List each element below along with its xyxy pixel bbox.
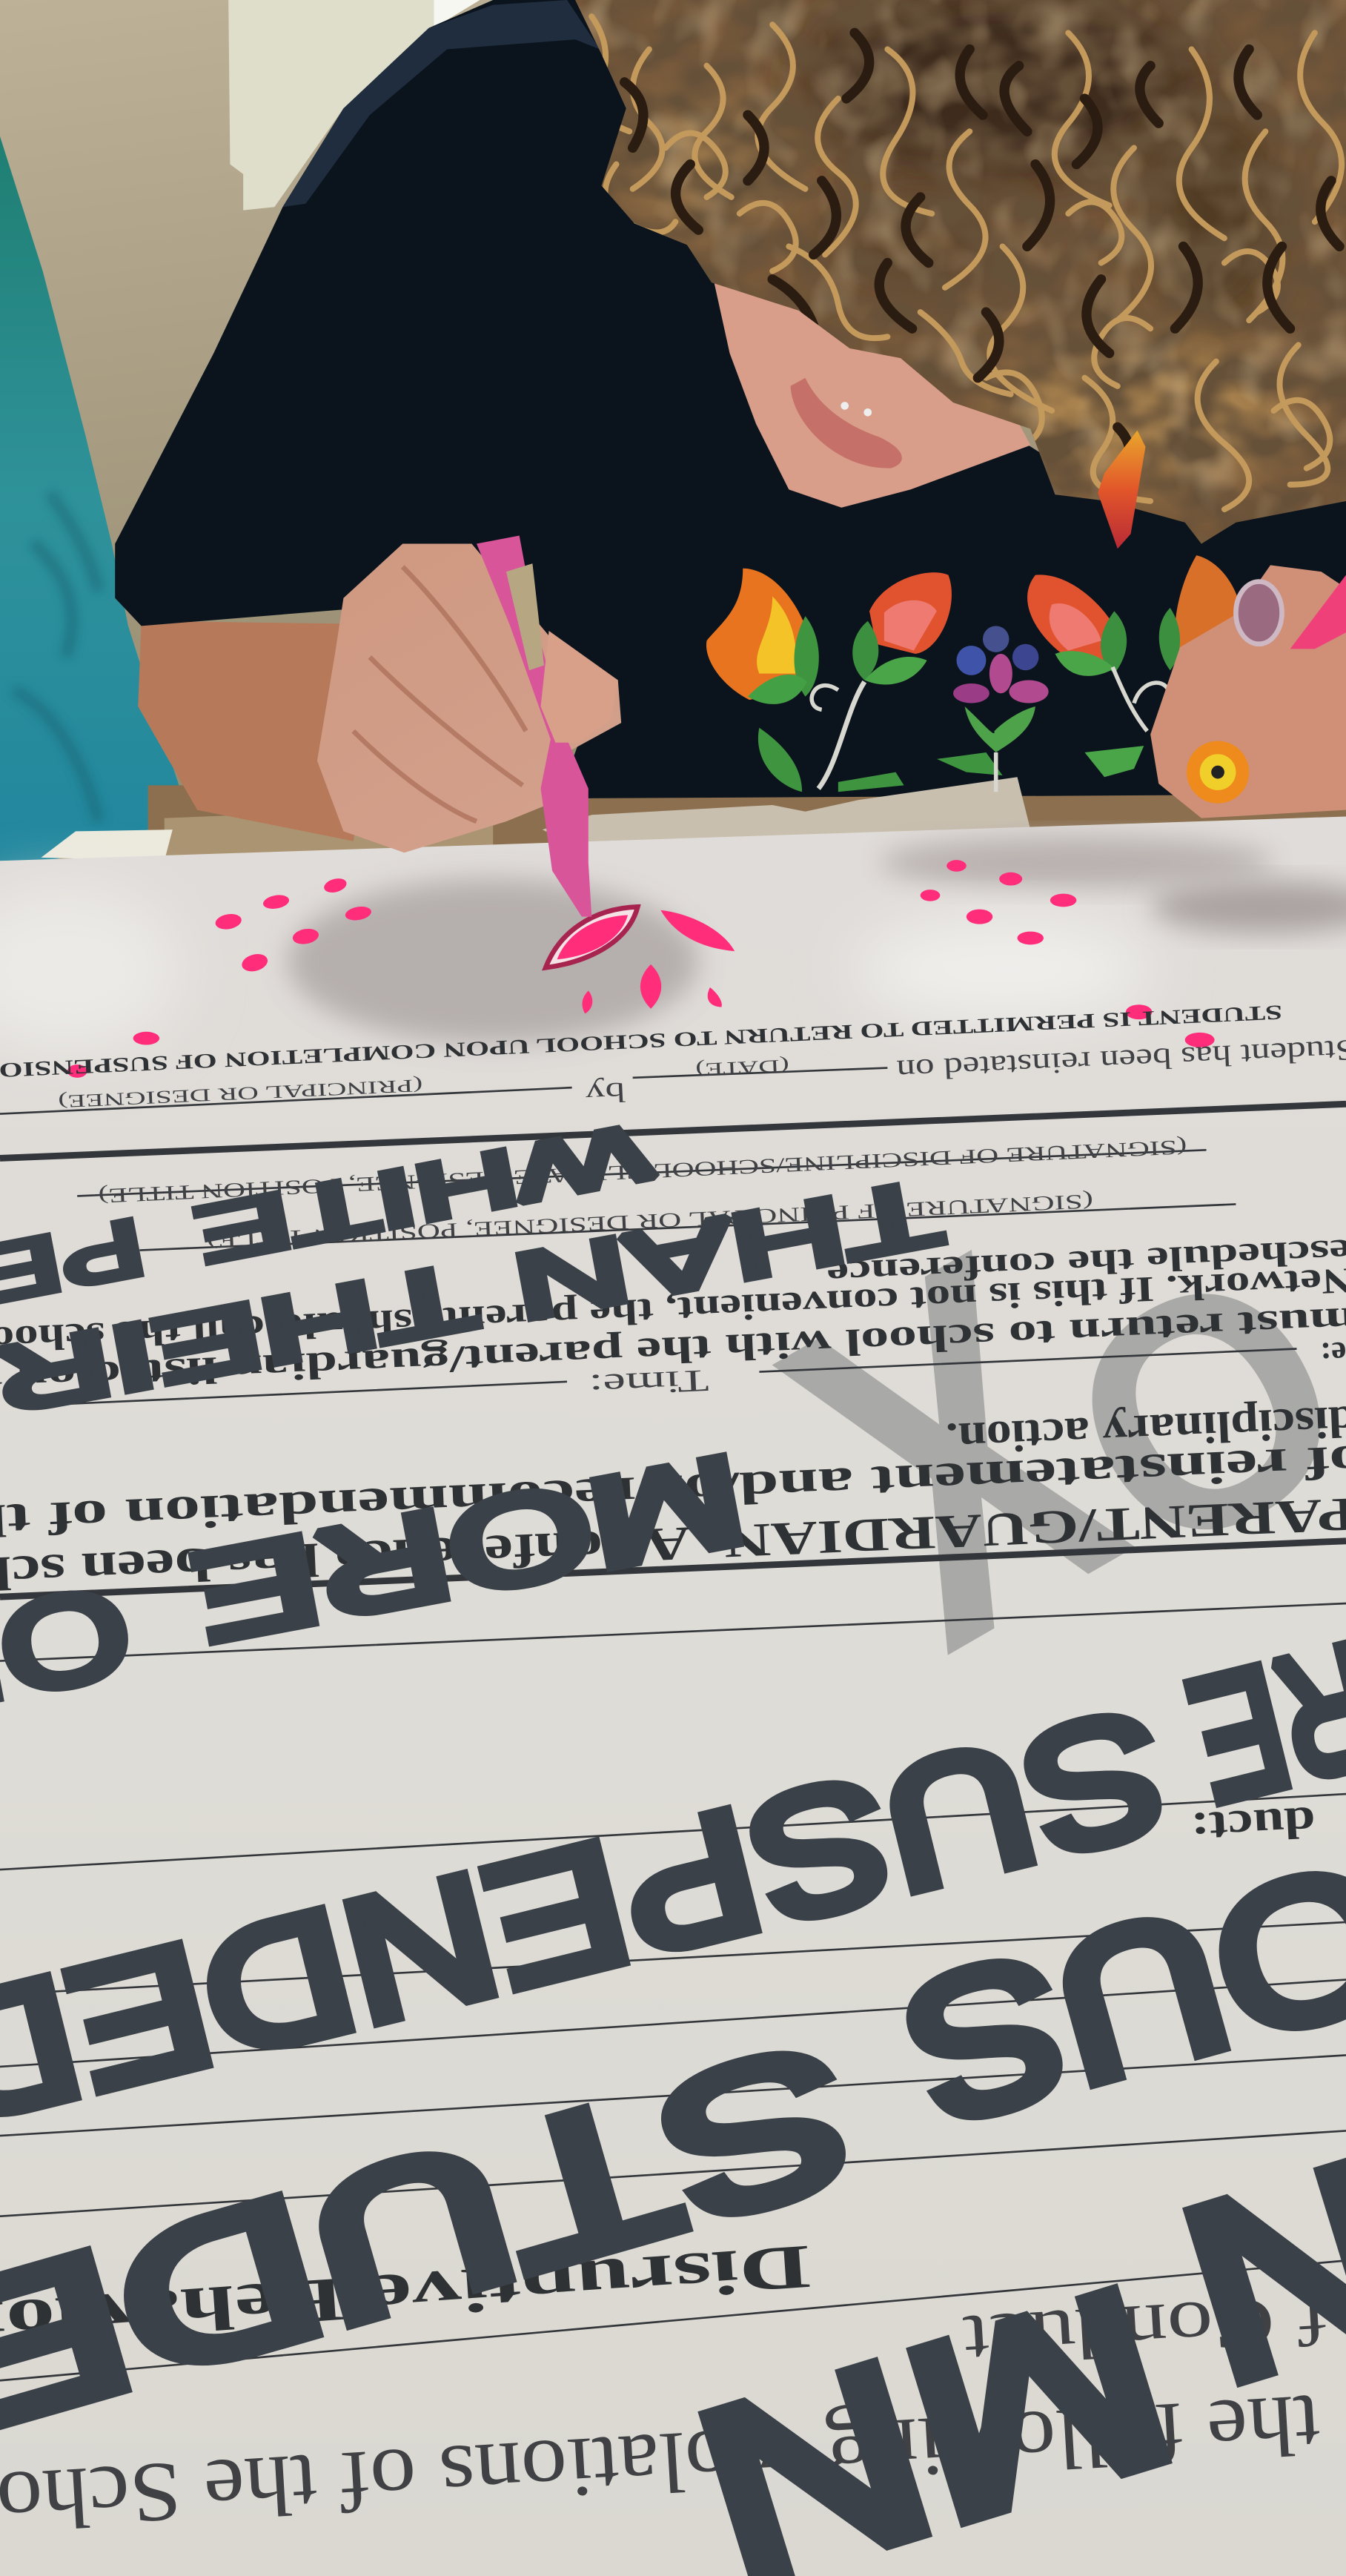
printed form rules — [0, 1068, 1346, 2380]
faded grey letter X: X — [715, 1158, 1198, 1754]
purple berries — [953, 626, 1049, 703]
right hand with pen — [1150, 565, 1346, 818]
printed form text: duct: — [1190, 1798, 1317, 1853]
printed form text: PARENT/GUARDIAN: A conference has been sched — [0, 1488, 1346, 1603]
patterned ring — [1187, 741, 1249, 804]
printed form text: (SIGNATURE OF PRINCIPAL OR DESIGNEE, POSITION TITLE) — [206, 1190, 1094, 1253]
banner headline: WHITE — [189, 1107, 657, 1279]
printed form text: STUDENT IS PERMITTED TO RETURN TO SCHOOL UPON COMPLETION OF SUSPENSION — [0, 1001, 1283, 1083]
nose piercing right — [863, 408, 872, 417]
printed form text: must return to school with the parent/guardian listed on the — [0, 1299, 1346, 1403]
teal cushion — [0, 136, 189, 861]
beaded earring — [1098, 431, 1145, 549]
printed form text: the following violations of the School — [0, 2377, 1322, 2555]
flower: orange left — [706, 569, 819, 704]
drawing hand — [317, 544, 621, 852]
nose piercing left — [841, 402, 849, 410]
window frame — [228, 0, 434, 211]
printed form text: of reinstatement and/or recommendation of the — [0, 1435, 1346, 1548]
white sheet corner — [41, 830, 173, 861]
banner paper — [0, 816, 1346, 2576]
wall background — [0, 0, 1346, 871]
curly hair — [559, 0, 1346, 559]
thumb — [541, 631, 618, 743]
pink dots and petals — [67, 860, 1215, 1078]
kraft paper under banner — [165, 805, 493, 858]
bright window gap — [434, 0, 480, 28]
banner headline: THAN — [506, 1160, 948, 1338]
printed form text: Disruptive Behaviors — [0, 2232, 812, 2363]
t-shirt — [115, 0, 1346, 798]
lips — [791, 378, 902, 468]
printed form text: (PRINCIPAL OR DESIGNEE) — [58, 1075, 423, 1111]
flower: orange right — [1159, 555, 1241, 670]
printed form text — [0, 1001, 1346, 2555]
printed form text: (SIGNATURE OF DISCIPLINE/SCHOOL CLIMATE DESIGNEE, POSITION TITLE) — [98, 1136, 1187, 1208]
pink marker — [477, 535, 591, 917]
arm — [138, 621, 394, 841]
printed form text: Network. If this is not convenient, the parents should call the school — [0, 1260, 1346, 1360]
printed form text: Time: — [589, 1363, 709, 1403]
banner headline: MORE — [184, 1429, 755, 1669]
wooden table — [148, 785, 1346, 867]
shadows and highlights on paper — [0, 836, 1346, 1051]
printed form text: by — [585, 1076, 626, 1109]
torn paper — [543, 777, 1030, 854]
shirt floral print — [706, 555, 1241, 792]
banner headline: SUSPENDED — [0, 1672, 1185, 2164]
printed form text: (DATE) — [695, 1055, 789, 1079]
flower: red tulip 2 — [1027, 575, 1127, 676]
face — [712, 271, 1030, 508]
green leaves and stems — [758, 667, 1170, 792]
banner headline — [0, 1107, 1346, 2576]
flower: red tulip 1 — [852, 572, 952, 684]
banner headline: THEIR — [0, 1244, 483, 1432]
